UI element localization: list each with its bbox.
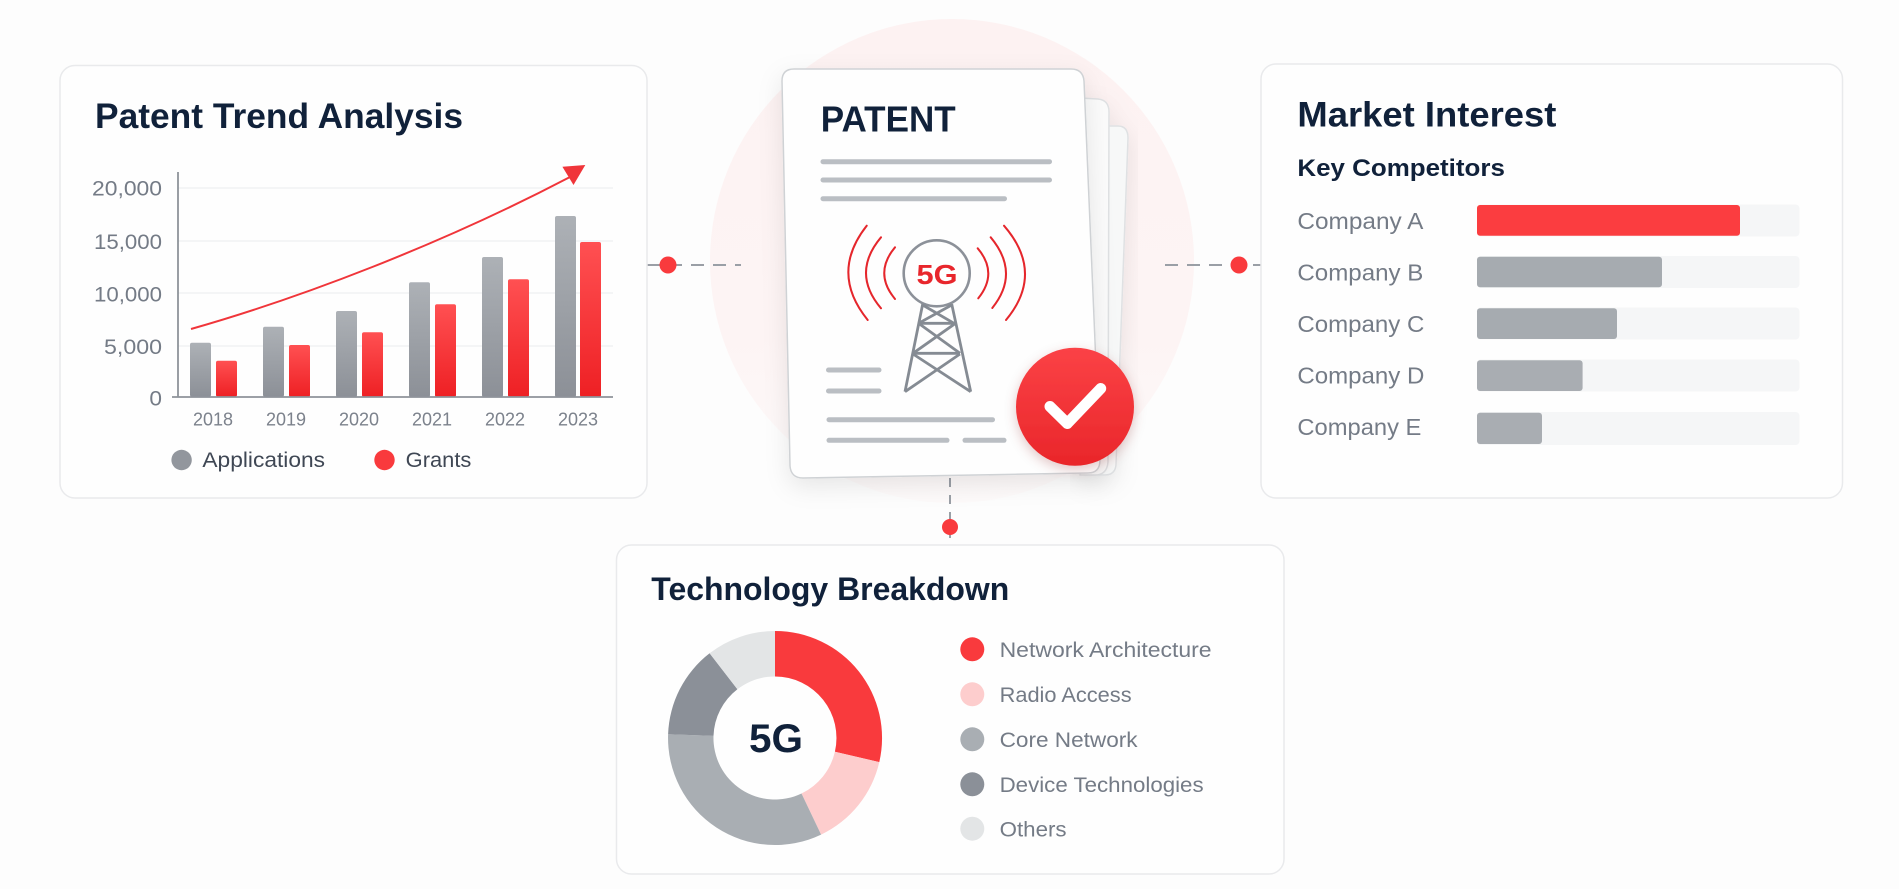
panel: technology breakdown [616,545,1284,874]
x axis labels [193,410,598,430]
card background [1261,64,1842,498]
competitor bars [1477,204,1800,445]
bar chart [190,216,601,397]
y axis labels: 5,000 [104,336,162,359]
x axis labels: 2018 [193,410,233,430]
legend: Grants [406,449,471,472]
text lines [823,162,1050,440]
trend arrow [191,165,585,329]
company labels: Company A [1297,208,1424,234]
stacked pages behind patent [1080,98,1128,475]
x axis labels: 2019 [266,410,306,430]
x axis labels: 2022 [485,410,525,430]
connector: market panel to patent [1165,256,1261,274]
heading: Market Interest [1297,96,1557,135]
patent document [782,69,1134,478]
donut chart [668,631,882,845]
y axis labels [92,178,162,410]
company labels [1297,208,1424,440]
company labels: Company B [1297,260,1423,286]
card background [616,545,1284,874]
company labels: Company E [1297,414,1421,440]
y axis labels: 15,000 [94,231,162,254]
y axis labels: 0 [149,388,162,410]
background circle [710,19,1194,503]
donut legend: Radio Access [1000,684,1132,707]
icon: 5G tower: 5G [916,259,958,290]
connector: trend panel to patent [647,256,741,274]
donut legend: Device Technologies [1000,774,1204,797]
icon: check badge [1016,348,1134,466]
legend [171,449,471,472]
donut legend: Network Architecture [1000,639,1212,662]
company labels: Company D [1297,362,1424,388]
x axis labels: 2023 [558,410,598,430]
heading: Patent Trend Analysis [95,97,463,136]
connector: patent to technology panel [942,478,958,545]
y axis labels: 10,000 [94,284,162,306]
legend: Applications [202,449,325,472]
icon: 5G tower [848,226,1025,392]
x axis labels: 2020 [339,410,379,430]
panel: market interest [1261,64,1842,498]
card background [60,66,647,498]
patent heading: PATENT [821,98,956,140]
page [782,69,1100,478]
donut chart: 5G [749,717,803,761]
panel: patent trend analysis [60,66,647,498]
donut legend: Others [1000,818,1067,842]
donut legend: Core Network [1000,729,1138,752]
x axis labels: 2021 [412,410,452,430]
heading: Technology Breakdown [651,571,1009,607]
y axis labels: 20,000 [92,178,162,200]
subheading: Key Competitors [1297,155,1505,182]
company labels: Company C [1297,311,1424,337]
donut legend [960,637,1212,842]
